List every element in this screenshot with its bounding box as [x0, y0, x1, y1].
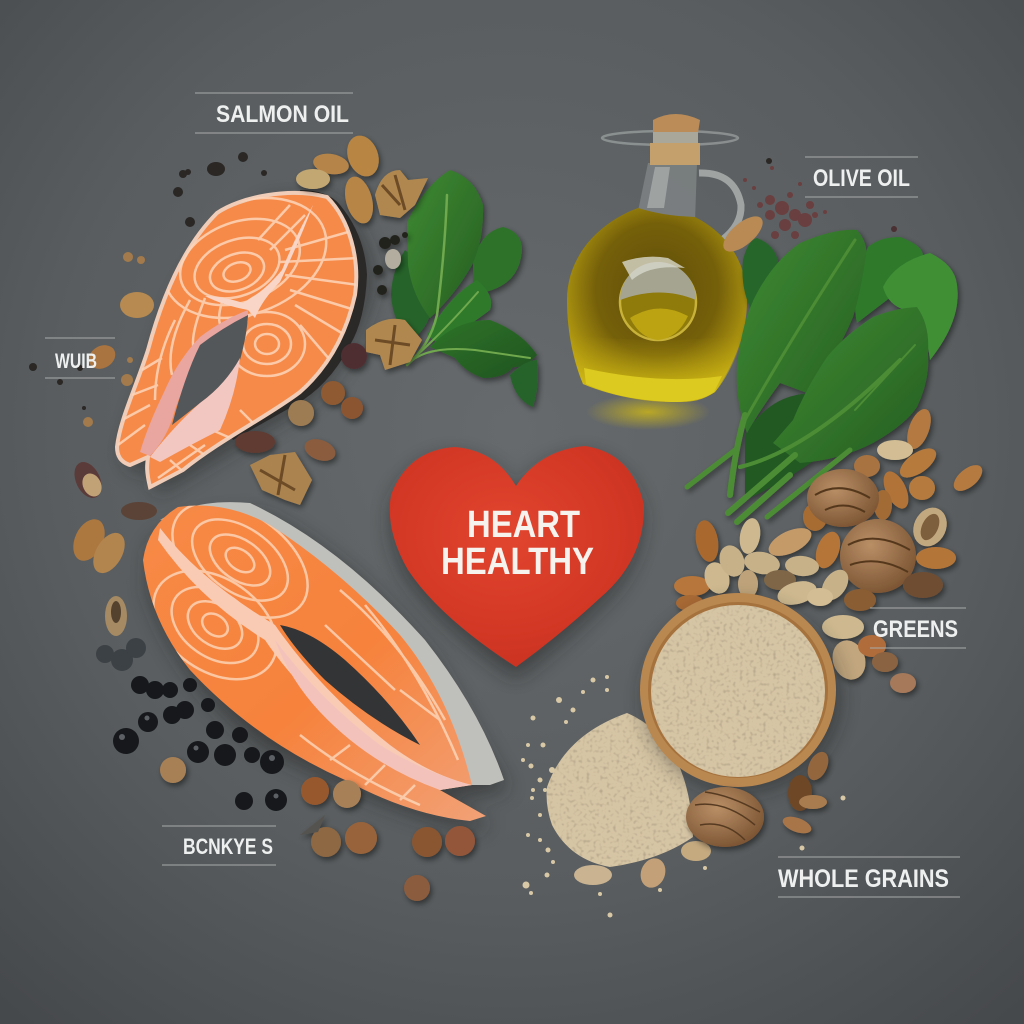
- label: salmon oil: SALMON OIL: [216, 101, 349, 128]
- walnut and nuts under bowl: [686, 749, 832, 847]
- nuts: bottom scatter: [160, 757, 475, 901]
- nuts: upper left scatter: [235, 131, 428, 505]
- nuts: left scatter: [29, 152, 267, 636]
- label: olive oil: OLIVE OIL: [813, 165, 910, 192]
- heart label: HEALTHY: [441, 541, 594, 583]
- loose grain pile: [521, 675, 846, 918]
- nuts: right cluster: [674, 406, 987, 693]
- heart label: HEART: [467, 504, 580, 546]
- label: berries: BCNKYE S: [183, 834, 273, 859]
- salmon steak: upper: [117, 177, 373, 495]
- berries: [96, 638, 287, 811]
- label: berries: [162, 826, 276, 865]
- heart: [390, 446, 644, 680]
- spinach: upper left bunch: [391, 170, 538, 407]
- salmon steak: lower: [133, 479, 508, 830]
- olive oil bottle: [567, 114, 768, 430]
- heart label: [441, 504, 594, 583]
- spinach: right bunch: [687, 230, 958, 522]
- label: nuts: WUIB: [55, 350, 97, 373]
- label: olive oil: [805, 157, 918, 197]
- label: nuts: [45, 338, 115, 378]
- label: greens: [870, 608, 966, 648]
- spice scatter near olive oil: [743, 158, 897, 239]
- label: greens: GREENS: [873, 616, 958, 643]
- label: whole grains: WHOLE GRAINS: [778, 865, 949, 893]
- bowl of grains: [640, 593, 840, 792]
